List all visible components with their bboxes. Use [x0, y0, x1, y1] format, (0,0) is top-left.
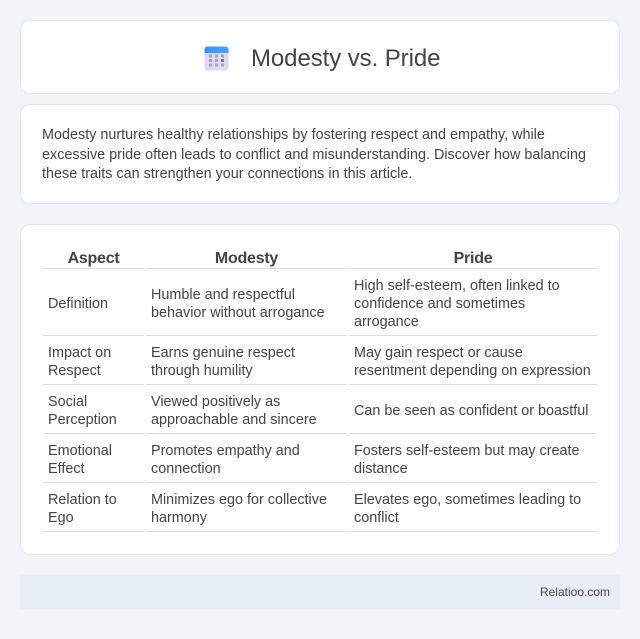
row: relation to ego: Ego [48, 510, 74, 526]
row: emotional effect: Fosters self-esteem but may create [354, 443, 580, 459]
row: social perception: Social [48, 394, 87, 410]
column heading: modesty: Modesty [215, 250, 278, 267]
column heading: aspect: Aspect [68, 250, 119, 267]
row: relation to ego: conflict [354, 510, 399, 526]
intro text: Modesty nurtures healthy relationships by fostering respect and empathy, while [42, 127, 545, 143]
row: emotional effect: connection [151, 461, 221, 477]
row: definition: Humble and respectful [151, 287, 295, 303]
row: social perception: Perception [48, 412, 117, 428]
panel: title card [20, 20, 620, 94]
row: relation to ego [48, 492, 581, 526]
row: definition [48, 278, 560, 330]
row: social perception: Can be seen as confident or boastful [354, 403, 588, 419]
column heading: pride: Pride [454, 250, 492, 267]
row: definition: behavior without arrogance [151, 305, 325, 321]
row: emotional effect [48, 443, 580, 477]
row: impact on respect [48, 345, 591, 379]
row: impact on respect: Earns genuine respect [151, 345, 295, 361]
row: emotional effect: distance [354, 461, 408, 477]
row: relation to ego: Relation to [48, 492, 117, 508]
row: relation to ego: Minimizes ego for collective [151, 492, 327, 508]
footer bar [20, 575, 620, 609]
row: emotional effect: Emotional [48, 443, 112, 459]
row: emotional effect: Effect [48, 461, 85, 477]
row: relation to ego: Elevates ego, sometimes leading to [354, 492, 581, 508]
row: impact on respect: resentment depending on expression [354, 363, 591, 379]
panel: introduction [20, 104, 620, 204]
row: definition: Definition [48, 296, 108, 312]
row: impact on respect: Impact on [48, 345, 111, 361]
row: social perception [48, 394, 588, 428]
intro text: these traits can strengthen your connections in this article. [42, 166, 412, 182]
footer credit: Relatioo.com [540, 585, 610, 599]
title: Modesty vs. Pride [251, 45, 440, 72]
panel: comparison table [20, 224, 620, 555]
row: emotional effect: Promotes empathy and [151, 443, 300, 459]
row: definition: arrogance [354, 314, 419, 330]
intro text: excessive pride often leads to conflict and misunderstanding. Discover how balancing [42, 146, 586, 162]
row: definition: confidence and sometimes [354, 296, 525, 312]
icon: calendar [204, 46, 228, 70]
row: relation to ego: harmony [151, 510, 207, 526]
row: definition: High self-esteem, often linked to [354, 278, 560, 294]
row: social perception: Viewed positively as [151, 394, 280, 410]
row: impact on respect: through humility [151, 363, 253, 379]
row: impact on respect: May gain respect or cause [354, 345, 523, 361]
row: social perception: approachable and sincere [151, 412, 317, 428]
intro text [42, 127, 586, 182]
row: impact on respect: Respect [48, 363, 101, 379]
